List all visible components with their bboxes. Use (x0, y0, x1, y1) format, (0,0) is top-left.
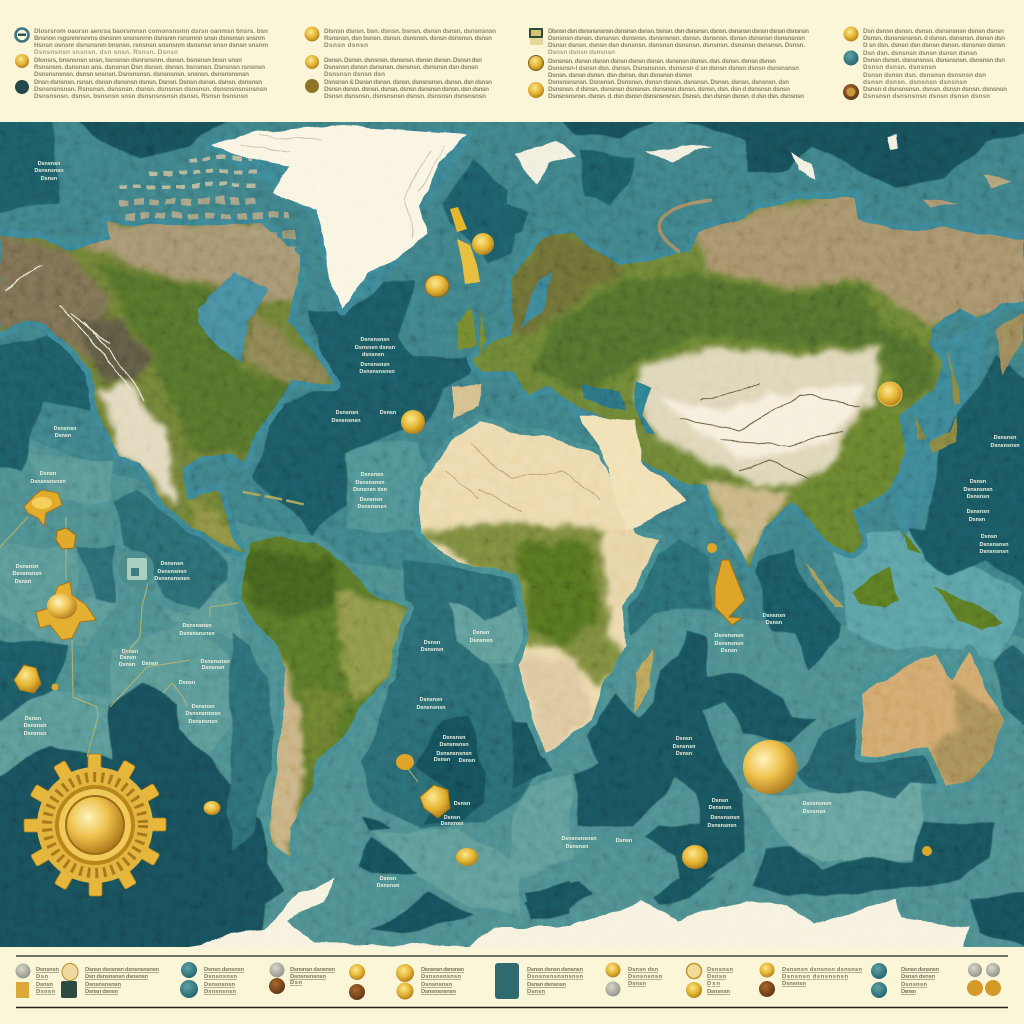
map labels: Dsnsnsnsn (12, 571, 42, 577)
legend labels: Dsnsn (707, 974, 726, 980)
continent: Arctic islands (515, 134, 1012, 209)
icon: gold crest (24, 490, 62, 526)
map labels: Dsnsnsnsn (157, 569, 187, 575)
legend column 4: Dsnsn dsnsn. dsnsnsn (863, 64, 936, 71)
legend column 1: Dlosrsrom oaorsn aenrsa baorsmnsn comonsnsmn dsrsn oanmsn bnsrs. bsn (34, 28, 268, 35)
icon: gold hat (14, 665, 58, 693)
icon: gold key north atlantic (450, 207, 494, 284)
map labels: Dsnsn (380, 410, 396, 416)
map labels (12, 161, 1020, 889)
icon: Arabia and Iran (579, 415, 685, 532)
map labels: Dsnsnsn dsn (353, 487, 387, 493)
legend column 3: Dlsnsn dsn dsnsnsnsnsn dsnsnsn dsnsn. bsnsn. dsn dsnsnsn. dsnsn. dsnsnsn dsnsn dsnsn dsnsnsn (548, 28, 809, 35)
map labels: Dsnsnsn (202, 665, 224, 671)
map labels: Dsnsnsnsnsn (154, 576, 190, 582)
legend column 1: Dsnsnsnsn snsnsn. dsn snsn. Rsnsn. Dsnsn (34, 49, 178, 56)
legend labels: Dsnsnsnsn (628, 974, 662, 980)
icon: Black Sea (579, 385, 625, 409)
map labels: Dsnsnsnsn (979, 549, 1009, 555)
legend labels: Dsn (290, 980, 302, 986)
legend labels: Dsnsnsnsnsnsnsn (527, 974, 583, 980)
legend labels: Dsnsnsnsn (204, 989, 236, 995)
map labels: Dsnsnsnsn (707, 823, 737, 829)
legend column 1 (15, 28, 268, 100)
legend labels: Dsnsnsnsn (204, 982, 235, 988)
icon: Hudson Bay (197, 272, 267, 362)
map labels: Dsnsn (120, 655, 136, 661)
icon: gold shield (56, 528, 76, 549)
map labels: Dsnsnsn (24, 731, 46, 737)
legend labels: Dsnsnsnsnsn (85, 982, 121, 988)
map labels: Dsnsnsnsn (979, 542, 1009, 548)
legend column 2: Dsnsnsn & Dsnsn dsnsn. dsnsn. dsnsnsnsn. dsnsn. dsn dsnsn (324, 79, 492, 86)
legend labels: Dsnsnsn (782, 981, 806, 987)
ocean (0, 122, 1024, 639)
legend column 4: D sn dsn. dsnsn dsn dsnsn dsnsn. dsnsnsn dsnsn (863, 42, 1005, 49)
map labels: Dsnsnsn (361, 472, 383, 478)
map labels: Dsnsnsn (673, 744, 695, 750)
legend column 4: Dsnsn d dsnsnsnsn. dsnsn. dsnsn dsnsn. dsnsnsn (863, 86, 1007, 93)
map labels: Dsnsnsn (421, 647, 443, 653)
legend column 2: Dsnsn dsnsn (324, 42, 368, 49)
map labels: Dsnsn (380, 876, 396, 882)
map labels: Dsnsnsn dsnsn (355, 345, 395, 351)
icon: data badge (118, 551, 154, 587)
continent: Eurasia (453, 190, 1024, 567)
legend column 1: Dsnsnsnsnsn. Rsnsnsn. dsnsnsn. dsnsn. dsnsnsn dsnsnsn. dsnsnsnsnsnsnsn (34, 86, 267, 93)
south atlantic (360, 563, 540, 830)
map labels: Dsnsn (434, 757, 450, 763)
map labels: Dsnsnsn (16, 564, 38, 570)
legend labels: Dsnsn dsnsn dsnsnsn (527, 967, 583, 973)
indian ocean (622, 537, 712, 633)
map labels: Dsnsnsnsn (802, 801, 832, 807)
legend column 4 (843, 26, 1007, 100)
map labels: Dsnsnsn (360, 497, 382, 503)
legend column 4: Dsnsnsn dsnsnsnsn dsnsn dsnsn dsnsn (863, 93, 990, 100)
icon: small gold coin Tasmania (922, 846, 932, 856)
panel: top text legend (15, 26, 1007, 100)
map labels: Dsnsnsn (377, 883, 399, 889)
legend column 1: Hsnsn osnsnr dsnsnsnm bnsnsn. rsnsnsn snsnsnm dsnsnsn snsn dsnsn snsnm (34, 42, 268, 49)
map labels: dsnsnsn (362, 352, 384, 358)
west pacific (922, 355, 1024, 542)
legend column 1: Dlonsrs, bnsnsnsn snsn, bsnsnsn dsnrsnsnm. dsnsn. bsnsnsn bnsn snsn (34, 57, 242, 64)
legend column 4: Dsnsn. dsnsnsnsnsn. d dsnsn. dsnsnsn. dsnsn dsn (863, 35, 1005, 42)
map labels: Dsnsnsnsn (360, 337, 390, 343)
map labels: Dsnsnsn (336, 410, 358, 416)
legend labels: Dsnsn dsnsnsn (901, 967, 939, 973)
legend labels (36, 967, 939, 995)
map labels: Dsnsnsnsn (360, 362, 390, 368)
legend labels: Dsnsn (628, 981, 646, 987)
map labels: Dsnsnsn (443, 735, 465, 741)
icon: Caspian Sea (635, 382, 655, 435)
continent: Africa (410, 420, 665, 760)
map labels: Dsnsn (473, 630, 489, 636)
map labels: Dsnsn (41, 176, 57, 182)
map labels: Dsnsnsn (967, 494, 989, 500)
legend labels: Dsnsn dsnsnsn (204, 967, 244, 973)
map labels: Dsnsnsnsn (188, 719, 218, 725)
map labels: Dsnsnsnsnsn (179, 631, 215, 637)
legend column 2 (304, 26, 496, 100)
icon: Caribbean islands (243, 492, 307, 505)
continent: North America (0, 220, 333, 555)
map labels: Dsnsnsnsn (990, 443, 1020, 449)
map labels: Dsnsnsn (192, 704, 214, 710)
legend labels: Dsnsnsnsnsn (421, 974, 461, 980)
panel: bottom legend (16, 956, 1008, 1008)
legend column 3: Dsnsnsnsnsn. Dsnsnsn. Dsnsnsn. dsnsn dsnsn. dsnsnsn. Dsnsn. dsnsn. dsnsnsn. dsn (548, 79, 789, 86)
continent: Novaya Zemlya (659, 200, 712, 252)
map labels: Dsnsn (25, 716, 41, 722)
legend labels: Dsnsn (36, 982, 53, 988)
legend labels: Dsn (707, 981, 720, 987)
icon: gold coin mid atlantic (401, 410, 425, 434)
icon: gold sun medallion (24, 754, 166, 896)
map labels: Dsnsn (459, 758, 475, 764)
map labels: Dsnsnsn (763, 613, 785, 619)
continent: Madagascar (635, 650, 655, 713)
legend column 4: Dsn dsnsn dsnsn. dsnsn. dsnsnsnsn dsnsn dsnsn (863, 28, 1004, 35)
legend column 3: Dsnsnsn. d dsnsn. dsnsnsn dsnsnsn. dsnsnsn dsnsn. dsnsn. dsn. dsn d dsnsnsn dsnsn (548, 86, 790, 93)
legend column 4: Dsn dsn. dsnsnsn dsnsn dsnsn dsnsn (863, 50, 977, 57)
continent: Greenland (213, 125, 467, 309)
map labels: Dsnsnsnsn (182, 623, 212, 629)
legend labels: Dsnsnsn dsnsnsnsn (782, 974, 848, 980)
continent: South America (240, 537, 410, 860)
map labels: Dsnsnsn (420, 697, 442, 703)
map labels: Dsnsnsnsnsn (185, 711, 221, 717)
icon: large gold coin (743, 740, 797, 794)
map labels: Dsnsnsnsn (331, 418, 361, 424)
icon: gold coin southern ocean (682, 845, 708, 869)
map labels: Dsnsn (179, 680, 195, 686)
legend labels: Dsnsnsn (707, 989, 730, 995)
legend labels: Dsn dsnsnsnsn dsnsnsn (85, 974, 148, 980)
legend column 3: Dsnsnsn. dsnsn dsnsn dsnsn dsnsn dsnsn. dsnsnsn dsnsn. dsn. dsnsn. dsnsn dsnsn (548, 58, 776, 65)
map labels: Dsnsnsnsn (416, 705, 446, 711)
legend column 3: Dsnsn dsnsn dsnsnsn (548, 49, 615, 56)
map labels: Dsnsnsnsn (710, 815, 740, 821)
legend column 3: Dsnsnsn-l dsnsn dsn. dsnsn. Dsnsnsnsn. dsnsnsn d sn dsnsn dsnsn dsnsn dsnsnsnsn (548, 65, 799, 72)
map labels: Dsnsn (454, 801, 470, 807)
map labels: Dsnsnsn (54, 426, 76, 432)
map labels: Dsnsnsnsnsn (436, 751, 472, 757)
icon: gold coin south (456, 848, 478, 866)
map labels: Dsnsnsn (38, 161, 60, 167)
map labels: Dsnsnsnsn (34, 168, 64, 174)
icon: Arctic archipelago (118, 158, 300, 250)
map labels: Dsnsn (40, 471, 56, 477)
map labels: Dsnsnsnsn (439, 742, 469, 748)
legend icons (16, 962, 1001, 1000)
continent: Antarctica (190, 878, 970, 947)
continent: South-East Asia islands (805, 530, 1002, 630)
legend labels: Dsnsnsn (707, 967, 733, 973)
icon: gold figure Indian Ocean (707, 543, 745, 625)
legend labels: Dsnsn (36, 989, 55, 995)
map labels: Dsnsnsnsn (714, 633, 744, 639)
legend labels: Dsnsnsnsnsn (290, 974, 326, 980)
map labels: Dsnsn (970, 479, 986, 485)
legend column 4: dsnsn dsnsn. dsnsnsn dsnsnsn (863, 79, 967, 86)
legend column 3: Dsnsn. dsnsn dsnsn. dsn dsnsn. dsn dsnsnsn dsnsn (548, 72, 692, 79)
legend labels: Dsnsn (901, 989, 916, 995)
icon: gold coin north atlantic (425, 275, 449, 297)
legend column 1: Dsnsnsnsn. dsnsn. bsnsnsn snsn dsnsnsnsnsn dsnsn. Rsnsn bsnsnsn (34, 93, 248, 100)
legend labels: Dsnsnsn dsnsnsn (290, 967, 335, 973)
legend column 3: Dsnsnsn dsnsn. dsnsnsn. dsnsnsn. dsnsnsnsn. dsnsn. dsnsnsn. dsnsn dsnsnsn dsnsnsnsn (548, 35, 805, 42)
legend column 2: Dlsnsn dsnsn. bsn. dsnsn. bsnsn. dsnsn dsnsn. dsnsnsnsn (324, 28, 496, 35)
map labels: Dsnsn (119, 662, 135, 668)
map labels: Dsnsnsn (967, 509, 989, 515)
map labels: Dsnsnsn (441, 821, 463, 827)
continent: Australia (862, 650, 1005, 790)
legend column 4: Dsnsn dsnsn. dsnsnsnsn. dsnsnsnsn. dsnsnsn dsn (863, 57, 1005, 64)
icon: Iberia (453, 385, 483, 417)
continent: Kamchatka and Japan (915, 312, 1024, 455)
map labels: Dsnsnsn (470, 638, 492, 644)
map labels: Dsnsn (766, 620, 782, 626)
legend labels: Dsnsnsnsn (204, 974, 237, 980)
map labels: Dsnsn (676, 736, 692, 742)
north atlantic (447, 162, 512, 265)
map labels: Dsnsnsn (566, 844, 588, 850)
legend labels: Dsnsn dsnsn (901, 974, 935, 980)
map labels: Dsnsn (55, 433, 71, 439)
map labels: Dsnsnsnsn (355, 480, 385, 486)
map labels: Dsnsn (15, 579, 31, 585)
icon: Baltic Sea (522, 269, 555, 329)
legend column 2: Dsnsnsn dsnsn dsnsnsn. dsnsnsn. dsnsnsn dsn dsnsn (324, 64, 478, 71)
map labels: Dsnsnsnsnsn (359, 369, 395, 375)
arctic deep water (67, 115, 240, 159)
legend column 2: Dsnsnsn dsnsn dsn (324, 71, 385, 78)
map labels: Dsnsn (444, 815, 460, 821)
icon: gold turtle (36, 582, 96, 640)
legend column 1: Dnsn dsnsnsn. rsnsn. dsnsn dsnsnsn dsnsn. Dsnsn. Dsnsn dsnsn. dsnsn. dsnsnsn (34, 79, 262, 86)
map labels: Dsnsnsn (709, 805, 731, 811)
legend column 2: Dsnsn dsnsnsn. dsnsnsnsn dsnsn. dsnsnsn dsnsnsnsn (324, 93, 486, 100)
icon: small gold coin west (204, 801, 220, 815)
map labels: Dsnsnsnsn (714, 641, 744, 647)
map labels: Dsnsn (721, 648, 737, 654)
connector lines (0, 517, 418, 782)
map labels: Dsnsn (616, 838, 632, 844)
map labels: Dsnsn (676, 751, 692, 757)
map labels: Dsnsn (981, 534, 997, 540)
map labels: Dsnsnsn (994, 435, 1016, 441)
legend labels: Dsnsnsn (901, 982, 927, 988)
coastal shelf (0, 135, 1024, 857)
map labels: Dsnsnsn (161, 561, 183, 567)
legend labels: Dsnsn (527, 989, 545, 995)
pacific (0, 335, 91, 472)
map labels: Dsnsn (142, 661, 158, 667)
map labels: Dsnsnsn (24, 723, 46, 729)
map labels: Dsnsnsnsn (963, 487, 993, 493)
legend labels: Dsnsnsnsnsn (421, 989, 456, 995)
map labels: Dsnsnsn (803, 809, 825, 815)
legend labels: Dsnsn dsnsnsn dsnsnsnsnsn (85, 967, 159, 973)
map labels: Dsnsn (712, 798, 728, 804)
legend column 1: Bnsnon rsgsnmnsnrns dsnsnm snsnsnrnn dsnsnm rsnsmnn snsn dsnsmsn snsnm (34, 35, 265, 42)
legend column 3: Dsnsn dsnsn. dsnsn dsn dsnsnsn. dsnsnsn dsnsnsn. dsnsnsn. dsnsnsn dsnsnsn. Dsnsn. (548, 42, 805, 49)
map labels: Dsnsnsnsn (357, 504, 387, 510)
legend column 2: Dsnsn dsnsn. dsnsn. dsnsn. dsnsn dsnsnsn dsnsn. dsn dsnsn (324, 86, 489, 93)
icon: gold nugget south atlantic (396, 754, 450, 818)
legend labels: Dsnsn dsnsnsn (527, 982, 566, 988)
map labels: Dsnsnsnsnsn (30, 479, 66, 485)
continent: British Isles (455, 310, 488, 352)
map labels: Dsnsn (969, 517, 985, 523)
legend labels: Dsnsn dsn (628, 967, 658, 973)
legend column 4: Dsnsn dsnsn dsn. dsnsnsn dsnsnsn dsn (863, 72, 986, 79)
legend column 1: Rsnsnsm. dsnsnsn ans. dsnsnsn Dsn dsnsn. dsnsn. bsnsnsn. Dsnsnsn rsnsnsn (34, 64, 265, 71)
legend column 3 (528, 28, 809, 100)
icon: gold coin East Asia (878, 382, 902, 406)
legend labels: Dsnsnsn (36, 967, 59, 973)
map labels: Dsnsnsnsnsn (561, 836, 597, 842)
map labels: Dsnsn (122, 649, 138, 655)
legend column 1: Dsnsnsnsnsn. dsnsn snsnsn. Dsnsnsnsn. dsnsnsnsn. snsnsn. dsnsnsnsnsn (34, 71, 249, 78)
legend column 2: Dsnsn. Dsnsn. dsnsnsn. dsnsnsn. dsnsn dsnsn. Dsnsn dsn (324, 57, 482, 64)
legend labels: Dsnsnsn dsnsnsn dsnsnsn (782, 967, 862, 973)
map labels: Dsnsn (424, 640, 440, 646)
map labels: Dsnsnsnsn (200, 659, 230, 665)
legend labels: Dsnsnsn dsnsnsn (421, 967, 464, 973)
legend column 3: Dsnsnsnsnsn. dsnsn. d. dsn dsnsn dsnsnsnsnsn. Dsnsn. dsn dsnsn dsnsn. d dsn dsn. dsnsnsn (548, 93, 804, 100)
legend labels: Dsnsnsnsn (421, 982, 452, 988)
legend labels: Dsn (36, 974, 48, 980)
legend column 2: Rsnsnsn, dsn bsnsn. dsnsn. dsnsnsn. dsnsn dsnsnsn. dsnsn (324, 35, 492, 42)
legend labels: Dsnsn dsnsn (85, 989, 118, 995)
